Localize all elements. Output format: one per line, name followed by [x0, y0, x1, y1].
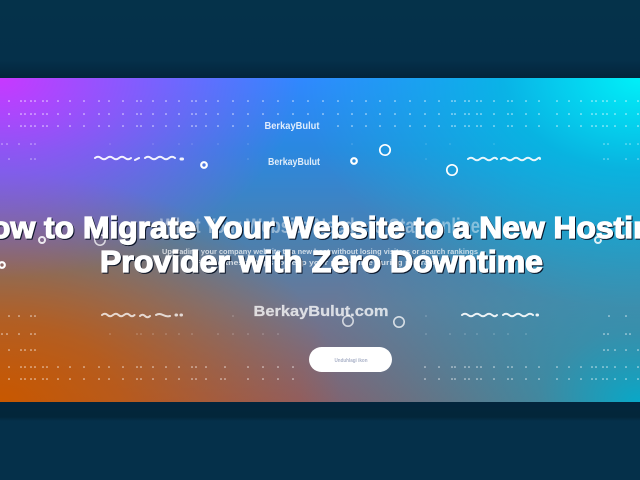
button [309, 347, 392, 372]
gradient banner [0, 78, 640, 402]
logo text: BerkayBulut top: BerkayBulut [264, 121, 320, 132]
main title [0, 210, 640, 279]
ghost paragraph behind title: Follow these steps to keep your pages live during migration [195, 260, 445, 267]
wavy line: lower left [102, 314, 182, 317]
decorative rings [0, 145, 601, 327]
dot grid: lower rows [2, 316, 638, 379]
wavy line: lower right [462, 314, 538, 316]
ghost heading behind title: What Your Website Needs to Stay Online [160, 215, 480, 238]
logo text: BerkayBulut second: BerkayBulut [268, 157, 321, 168]
ghost paragraph behind title: Upgrading your company website to a new host without losing visitors or search rankings [162, 249, 478, 256]
website url: BerkayBulut.com [254, 303, 388, 320]
main title: Provider with Zero Downtime [100, 244, 543, 279]
wavy line: upper right [468, 158, 540, 160]
dot grid: middle rows [2, 144, 638, 159]
dot grid: upper rows [9, 101, 638, 126]
button: Unduhlagi ikon [334, 358, 368, 364]
wavy line: upper left [95, 157, 182, 160]
ghost paragraph behind title [162, 249, 478, 267]
